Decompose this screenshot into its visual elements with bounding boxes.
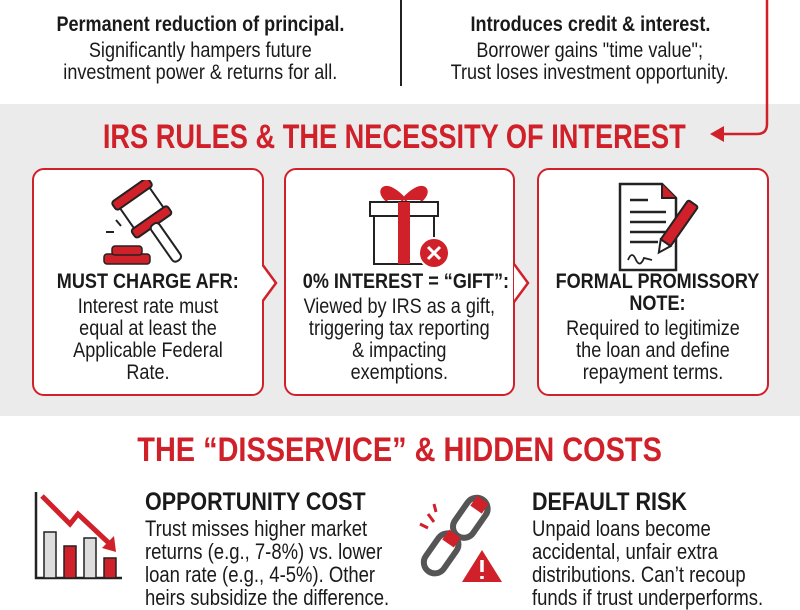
text: default risk: DEFAULT RISK bbox=[532, 488, 687, 516]
top section left text bbox=[56, 13, 344, 84]
top section left text: investment power & returns for all. bbox=[63, 61, 337, 84]
text: MUST CHARGE AFR: bbox=[57, 270, 239, 293]
text: NOTE: bbox=[629, 292, 686, 315]
text bbox=[556, 270, 759, 384]
chevrons between panels bbox=[262, 263, 530, 303]
text: FORMAL PROMISSORY bbox=[556, 270, 759, 293]
top section left text: Permanent reduction of principal. bbox=[56, 13, 344, 36]
text: the loan and define bbox=[576, 339, 730, 362]
text: opportunity cost: Trust misses higher market bbox=[145, 516, 367, 541]
text: opportunity cost: returns (e.g., 7-8%) vs. lower bbox=[145, 539, 382, 564]
top section right text: Trust loses investment opportunity. bbox=[451, 61, 729, 84]
text: default risk: Unpaid loans become bbox=[532, 516, 711, 541]
text: Rate. bbox=[126, 361, 170, 384]
icon: gift with x bbox=[369, 186, 448, 267]
top section right text bbox=[451, 13, 729, 84]
icon: broken chain with warning bbox=[419, 494, 502, 582]
text: default risk bbox=[532, 488, 763, 610]
text: opportunity cost bbox=[145, 488, 389, 610]
heading: IRS rules: IRS RULES & THE NECESSITY OF INTEREST bbox=[103, 118, 686, 156]
text: opportunity cost: OPPORTUNITY COST bbox=[145, 488, 366, 516]
icon: declining chart bbox=[34, 492, 122, 580]
icon: document with pen bbox=[618, 182, 698, 272]
arrow: connector bbox=[710, 0, 768, 142]
top section left text: Significantly hampers future bbox=[89, 39, 311, 62]
text: Applicable Federal bbox=[73, 339, 223, 362]
top section right text: Introduces credit & interest. bbox=[470, 13, 710, 36]
panel: must charge AFR bbox=[32, 168, 264, 396]
text: Viewed by IRS as a gift, bbox=[304, 295, 495, 318]
text: opportunity cost: loan rate (e.g., 4-5%). Other bbox=[145, 562, 375, 587]
text: exemptions. bbox=[351, 361, 448, 384]
panel: promissory note bbox=[537, 168, 769, 396]
text: default risk: funds if trust underperforms. bbox=[532, 585, 763, 610]
heading: disservice: THE “DISSERVICE” & HIDDEN COSTS bbox=[138, 431, 662, 469]
text: & impacting bbox=[352, 339, 447, 362]
icon: gavel bbox=[103, 180, 182, 265]
text: default risk: accidental, unfair extra bbox=[532, 539, 718, 564]
text: default risk: distributions. Can’t recoup bbox=[532, 562, 746, 587]
gray band bbox=[0, 104, 800, 416]
text: Required to legitimize bbox=[566, 317, 740, 340]
text: repayment terms. bbox=[583, 361, 723, 384]
text: equal at least the bbox=[79, 317, 217, 340]
text: triggering tax reporting bbox=[309, 317, 490, 340]
panel: 0% interest gift bbox=[284, 168, 515, 396]
divider bbox=[400, 0, 402, 86]
top section right text: Borrower gains "time value"; bbox=[477, 39, 703, 62]
text: opportunity cost: heirs subsidize the difference. bbox=[145, 585, 389, 610]
text: 0% INTEREST = “GIFT”: bbox=[303, 270, 509, 293]
text bbox=[57, 270, 239, 384]
text bbox=[303, 270, 509, 384]
text: Interest rate must bbox=[78, 295, 218, 318]
